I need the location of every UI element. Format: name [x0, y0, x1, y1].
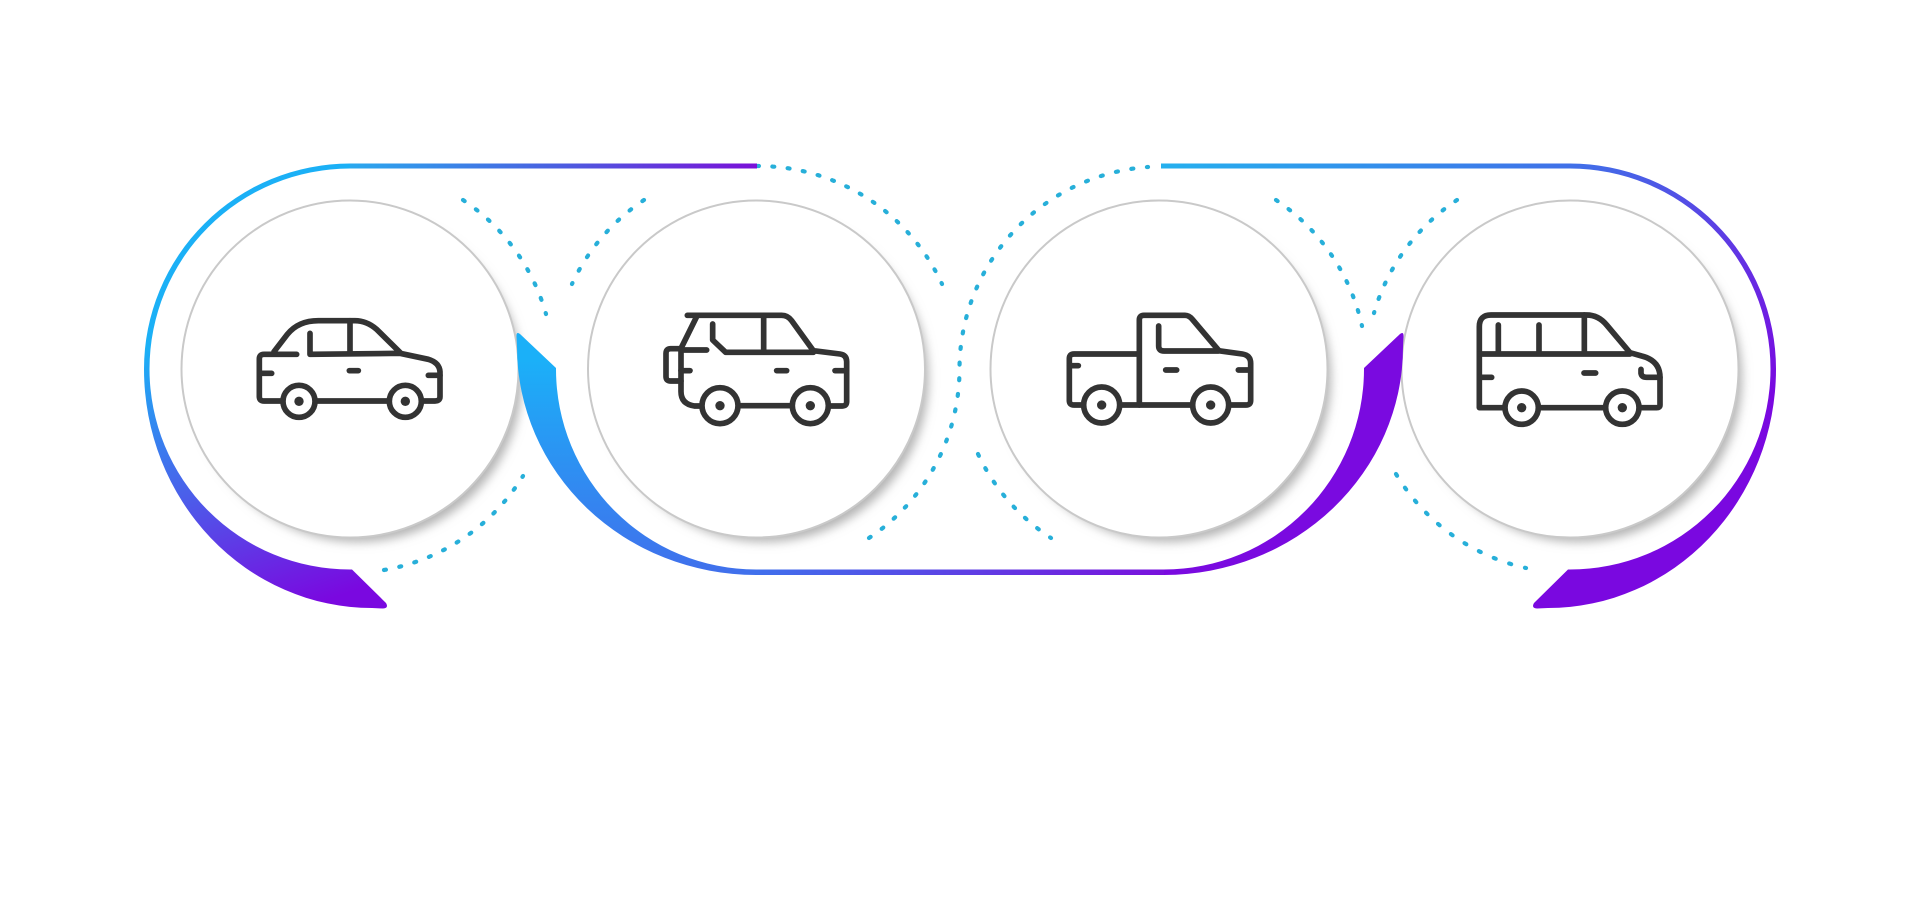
ribbon 2: lower left crescent with bottom line	[516, 333, 1164, 575]
circle 4 with shadow	[1402, 200, 1742, 542]
circle 3 with shadow	[990, 200, 1331, 542]
ribbon 3: lower right crescent	[1164, 333, 1404, 575]
icon: pickup truck	[1069, 315, 1251, 423]
circle 2 with shadow	[588, 200, 928, 542]
icon: minivan	[1479, 315, 1660, 424]
icon: SUV with spare wheel	[666, 315, 847, 424]
circle 1 with shadow	[182, 200, 522, 542]
ribbon 4: right arc with top line	[1161, 164, 1776, 608]
ribbon 1: left arc with top line	[144, 164, 757, 608]
icon: sedan car	[259, 321, 440, 417]
dotted connector arcs	[384, 166, 1526, 570]
